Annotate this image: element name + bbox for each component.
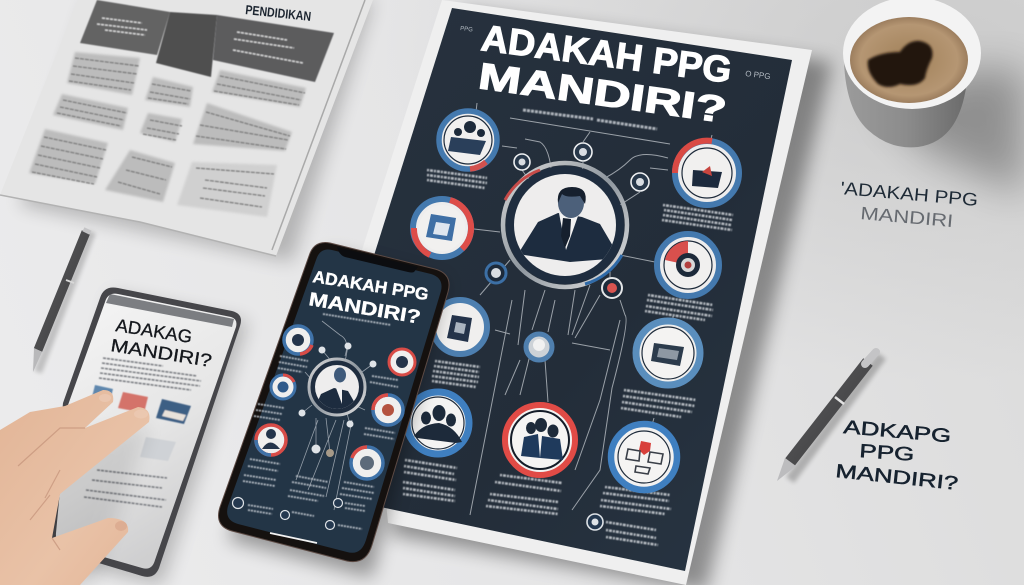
tablet title: ADAKAG [114,315,194,347]
icon ring: people with podium [439,111,497,169]
newspaper text blocks [29,52,306,217]
poster title: MANDIRI? [476,55,729,131]
label: adkapg ppg mandiri: PPG [859,441,915,466]
panel: newspaper [0,0,373,262]
panel: poster [362,0,840,585]
tablet title: MANDIRI? [109,335,213,371]
icon ring: shield and labels [611,424,677,490]
panel: smartphone [218,243,449,578]
phone icon rings [256,326,415,479]
poster paper [362,0,812,585]
cup shadow [880,70,1024,195]
pen: right [777,352,882,481]
tablet body [50,287,241,577]
coffee surface [850,17,968,103]
poster small logos: PPG [460,26,473,34]
central figure circle [503,163,627,287]
icon ring: window document [413,199,471,257]
tablet status bar [106,294,234,327]
phone notch [337,247,418,272]
icon ring: briefcase [675,141,739,205]
tablet text [84,358,201,507]
poster small logos [460,26,771,81]
phone title: MANDIRI? [307,289,422,329]
cup rim [843,0,981,109]
phone title: ADAKAH PPG [311,267,430,304]
phone footer logos [232,498,342,530]
phone central figure [309,359,365,415]
phone connector lines [296,321,373,510]
label: adakah ppg mandiri right: 'ADAKAH PPG [840,178,979,210]
panel: tablet [50,287,248,585]
label: adkapg ppg mandiri: MANDIRI? [834,461,959,495]
footer logo [587,514,603,530]
newspaper dark banners [80,0,334,82]
label: adkapg ppg mandiri: ADKAPG [843,417,952,447]
phone body [218,243,449,562]
phone screen [227,249,442,553]
icon ring: target [657,234,719,296]
icon ring: three people blue [407,392,469,454]
poster small logos: O PPG [745,69,771,81]
poster dark background [300,8,792,571]
coffee dark spot [868,41,932,87]
hand silhouette [0,390,150,585]
poster text blocks [403,170,733,545]
phone subtitle and text lines [243,314,398,529]
poster title: ADAKAH PPG [479,17,734,91]
phone small nodes [298,342,376,457]
pen: left [33,229,92,372]
central figure silhouette [520,187,612,262]
label: adakah ppg mandiri right [840,178,979,231]
icon ring: laptop [636,321,700,385]
icon ring: three people red [505,405,575,475]
small node circles [486,143,649,360]
phone title [307,267,430,329]
cup body [844,62,968,147]
coffee cup [843,0,1024,195]
poster connector lines [470,103,712,515]
tablet thumbnails [91,385,191,461]
tablet screen [56,294,236,569]
finger creases and nails [18,394,148,550]
poster subtitle [523,110,657,129]
tablet title [109,315,213,371]
label: adkapg ppg mandiri [834,417,959,495]
hand [0,390,150,585]
phone home indicator [270,533,317,543]
icon ring: certificate [433,300,487,354]
label: adakah ppg mandiri right: MANDIRI [860,203,954,231]
newspaper headline: PENDIDIKAN [245,2,312,24]
poster title [476,17,734,131]
